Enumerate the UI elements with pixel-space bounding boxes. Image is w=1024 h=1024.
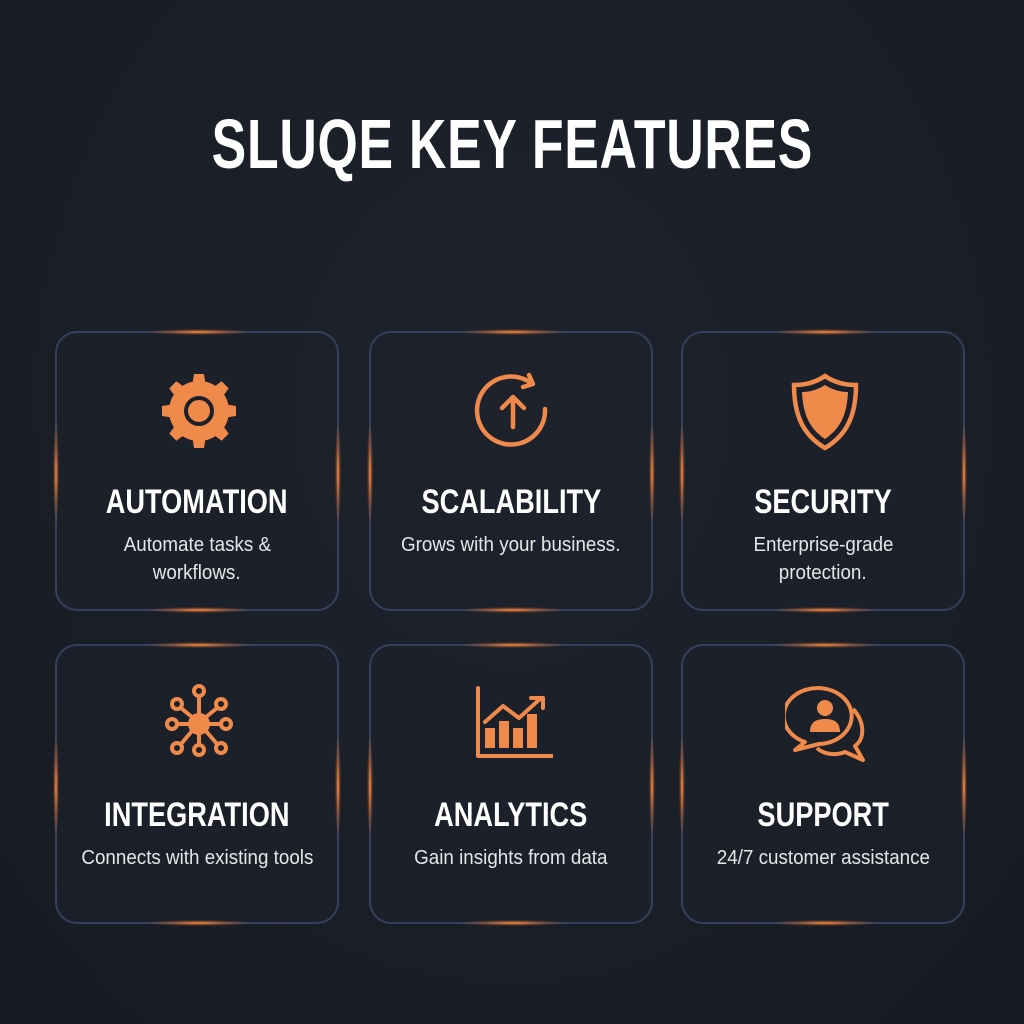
text: 24/7 customer assistance — [716, 847, 930, 869]
text — [123, 534, 271, 584]
icon: shield — [792, 373, 858, 451]
text: workflows. — [153, 562, 241, 584]
icon: circular arrow up — [474, 372, 548, 447]
panel: analytics — [369, 644, 653, 924]
icon: chat bubbles — [785, 686, 865, 762]
panel: scalability — [369, 331, 653, 611]
heading: SUPPORT — [757, 796, 889, 834]
panel: security — [681, 331, 965, 611]
heading: INTEGRATION — [104, 796, 290, 834]
icon: network — [165, 684, 233, 757]
text: protection. — [779, 562, 867, 584]
text — [753, 534, 893, 584]
icon: gear — [162, 374, 236, 448]
panel: support — [681, 644, 965, 924]
heading: SECURITY — [754, 483, 892, 521]
title: SLUQE KEY FEATURES — [211, 105, 813, 183]
text: Grows with your business. — [401, 534, 621, 556]
text: Gain insights from data — [414, 847, 608, 869]
text: Enterprise-grade — [753, 534, 893, 556]
heading: SCALABILITY — [421, 483, 601, 521]
text: Automate tasks & — [123, 534, 271, 556]
panel: automation — [55, 331, 339, 611]
heading: ANALYTICS — [434, 796, 588, 834]
icon: bar chart — [476, 686, 553, 758]
panel: integration — [55, 644, 339, 924]
text: Connects with existing tools — [81, 847, 313, 869]
heading: AUTOMATION — [106, 483, 288, 521]
